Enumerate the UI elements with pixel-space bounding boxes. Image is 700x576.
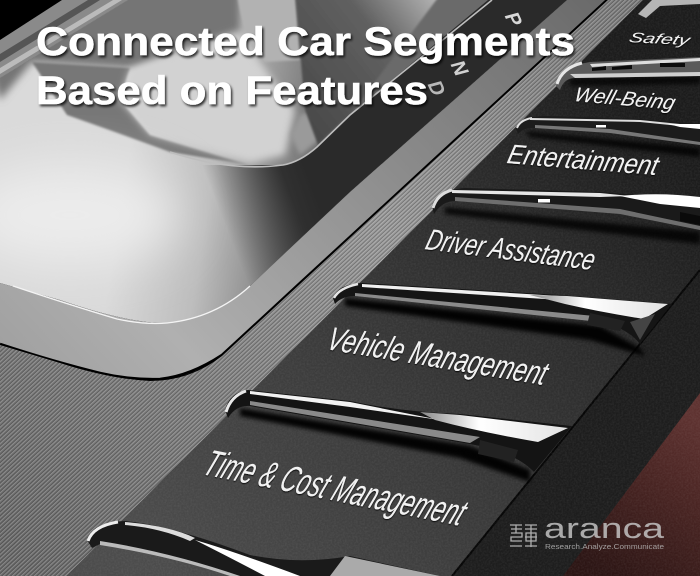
letter P: P — [499, 11, 526, 28]
frame outer black line — [0, 0, 607, 379]
logo wordmark: aranca — [544, 513, 665, 545]
lower glass bright cloud — [0, 165, 180, 265]
chrome: entertainment divider — [432, 188, 700, 244]
label: Entertainment: Entertainment — [505, 138, 663, 181]
chrome: driver assistance divider — [333, 283, 672, 356]
chrome: time and cost divider — [87, 521, 440, 576]
glass inner bright area — [120, 35, 295, 163]
chrome: top edge — [638, 0, 700, 18]
label: Safety: Safety — [627, 30, 694, 49]
chrome: safety divider — [556, 57, 700, 90]
label: Vehicle Management: Vehicle Management — [322, 321, 554, 393]
curved glass edge — [170, 0, 492, 167]
reflected gear knob base — [293, 112, 317, 154]
letter N: N — [445, 59, 473, 78]
logo tagline: Research.Analyze.Communicate — [545, 542, 664, 551]
title line 2: Based on Features — [36, 69, 428, 113]
panel edge line — [452, 270, 700, 576]
label: Time and Cost Management: Time & Cost Management — [198, 442, 474, 533]
title line 1: Connected Car Segments — [36, 20, 575, 64]
upper chrome strip — [0, 0, 128, 78]
label: Well-Being: Well-Being — [572, 83, 679, 114]
shifter knob region — [295, 0, 440, 145]
silver frame band — [0, 0, 607, 380]
glass dark wedge — [32, 62, 250, 165]
label: Driver Assistance: Driver Assistance — [422, 224, 600, 277]
title — [36, 20, 575, 113]
gear selector letters — [422, 11, 526, 98]
chrome: vehicle management divider — [225, 390, 572, 482]
panel: display glass — [0, 0, 567, 323]
segment labels — [198, 30, 694, 533]
letter D: D — [422, 79, 450, 98]
frame white edge — [13, 286, 250, 324]
reflected gear knob — [237, 0, 300, 62]
glass upper reflection — [0, 0, 240, 100]
chrome: well-being divider — [516, 116, 700, 157]
panel: red leather — [563, 393, 700, 576]
aranca logo — [510, 513, 665, 551]
dashboard dark panel with controls — [206, 0, 566, 282]
logo icon — [510, 525, 537, 547]
